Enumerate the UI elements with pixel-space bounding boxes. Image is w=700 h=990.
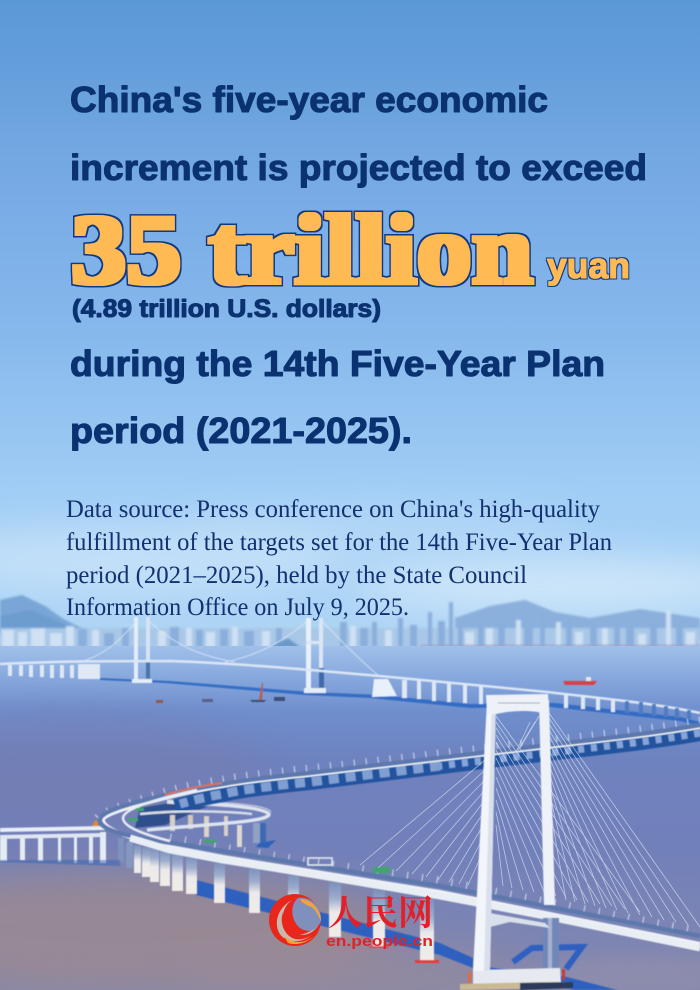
far bridge span: [0, 617, 700, 726]
tower left leg: [473, 700, 496, 971]
US dollar conversion: (4.89 trillion U.S. dollars): [72, 295, 381, 323]
far bridge left piers: [8, 664, 100, 679]
main suspension tower: [460, 694, 573, 990]
logo Chinese name: 人民网: [328, 886, 433, 936]
tower lower pier: [543, 918, 559, 970]
city skyline: [0, 602, 700, 650]
far bridge deck: [0, 661, 700, 713]
deck road curve: [103, 727, 700, 944]
sky background: [0, 0, 700, 660]
data source note: [66, 496, 612, 621]
logo URL: en.people.cn: [326, 933, 433, 950]
distant mountains: [0, 595, 700, 640]
logo: People's Daily Online: [269, 886, 433, 950]
ships: [156, 677, 597, 703]
far bridge cables: [80, 622, 379, 676]
sea: [0, 646, 700, 990]
data source note: Information Office on July 9, 2025.: [66, 594, 409, 621]
loop ramp interchange: [135, 798, 276, 848]
far anchor block: [372, 679, 397, 697]
logo mark: [269, 894, 321, 946]
upper deck lamp posts: [97, 720, 700, 818]
far bridge towers: [132, 617, 326, 693]
near bridge piers: [118, 838, 439, 963]
data source note: fulfillment of the targets set for the 14th Five-Year Plan: [66, 529, 612, 556]
near deck lamp posts: [170, 838, 700, 932]
far approach piers: [402, 680, 615, 712]
unit: yuan: yuan: [547, 245, 630, 286]
left access ramps: [0, 819, 120, 866]
blue shadow of far bridge: [100, 678, 700, 726]
headline: line 4: period (2021-2025).: [70, 410, 412, 451]
inner ring road: [123, 790, 197, 841]
near bridge blue shadow: [196, 880, 617, 990]
tower lower strut: [490, 913, 550, 928]
main deck: [97, 720, 700, 948]
big figure: 35 trillion: 35 trillion: [71, 194, 533, 305]
tower right leg: [539, 700, 555, 905]
data source note: Data source: Press conference on China's high-quality: [66, 496, 600, 523]
tower top beam: [486, 694, 549, 714]
headline: line 3: during the 14th Five-Year Plan: [70, 343, 605, 384]
upper deck girders: [175, 733, 700, 806]
road signs: [128, 808, 390, 873]
tower shadow on water: [513, 947, 582, 969]
stay cables: [360, 713, 700, 927]
headline: line 2: increment is projected to exceed: [70, 147, 647, 188]
headline: line 1: China's five-year economic: [70, 79, 548, 120]
tower base: [473, 968, 561, 984]
near deck white girder: [130, 838, 700, 948]
data source note: period (2021–2025), held by the State Council: [66, 562, 527, 589]
